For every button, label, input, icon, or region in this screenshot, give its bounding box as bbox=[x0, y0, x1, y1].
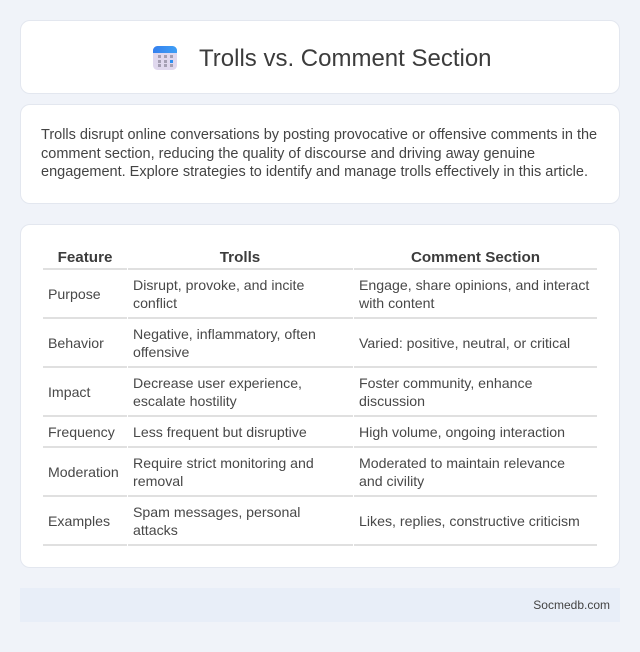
row: Behavior: Behavior bbox=[48, 335, 104, 351]
row: Examples: Likes, replies, constructive criticism bbox=[359, 513, 580, 529]
table header: Feature bbox=[58, 249, 112, 266]
row: Examples bbox=[43, 495, 597, 546]
table header: Comment Section bbox=[411, 249, 540, 266]
row: Behavior: offensive bbox=[133, 344, 189, 360]
row: Purpose: with content bbox=[359, 295, 434, 311]
row: Frequency: Less frequent but disruptive bbox=[133, 424, 307, 440]
row: Examples: Spam messages, personal bbox=[133, 504, 300, 520]
panel: title card bbox=[20, 20, 620, 94]
row: Impact: Decrease user experience, bbox=[133, 375, 302, 391]
row: Frequency bbox=[43, 415, 597, 440]
row: Frequency: High volume, ongoing interaction bbox=[359, 424, 565, 440]
row: Moderation: and civility bbox=[359, 473, 424, 489]
intro text: engagement. Explore strategies to identify and manage trolls effectively in this article. bbox=[41, 164, 588, 180]
panel: introduction bbox=[20, 104, 620, 204]
row: Behavior: Negative, inflammatory, often bbox=[133, 326, 316, 342]
row: Examples: Examples bbox=[48, 513, 110, 529]
row: Impact: Impact bbox=[48, 384, 90, 400]
row: Moderation: Require strict monitoring and bbox=[133, 455, 314, 471]
row: Purpose: conflict bbox=[133, 295, 177, 311]
icon: calendar bbox=[153, 46, 177, 70]
row: Behavior bbox=[43, 317, 597, 360]
row: Moderation: Moderation bbox=[48, 464, 119, 480]
row: Moderation: removal bbox=[133, 473, 183, 489]
intro text: comment section, reducing the quality of discourse and driving away genuine bbox=[41, 146, 535, 162]
title: Trolls vs. Comment Section bbox=[199, 45, 492, 72]
row: Impact: Foster community, enhance bbox=[359, 375, 532, 391]
row: Behavior: Varied: positive, neutral, or critical bbox=[359, 335, 570, 351]
row: Purpose: Engage, share opinions, and interact bbox=[359, 277, 589, 293]
row: Purpose: Purpose bbox=[48, 286, 101, 302]
row: Impact: discussion bbox=[359, 393, 425, 409]
table header: Trolls bbox=[220, 249, 260, 266]
row: Purpose bbox=[43, 268, 597, 311]
row: Impact bbox=[43, 366, 597, 409]
intro text: Trolls disrupt online conversations by posting provocative or offensive comments in the bbox=[41, 127, 597, 143]
intro text bbox=[41, 127, 597, 180]
row: Moderation bbox=[43, 446, 597, 489]
table header bbox=[58, 249, 540, 266]
row: Purpose: Disrupt, provoke, and incite bbox=[133, 277, 304, 293]
row: Impact: escalate hostility bbox=[133, 393, 237, 409]
panel: comparison table bbox=[20, 224, 620, 568]
footer bar bbox=[20, 588, 620, 622]
footer credit: Socmedb.com bbox=[533, 598, 610, 612]
row: Examples: attacks bbox=[133, 522, 178, 538]
row: Moderation: Moderated to maintain relevance bbox=[359, 455, 565, 471]
row: Frequency: Frequency bbox=[48, 424, 115, 440]
